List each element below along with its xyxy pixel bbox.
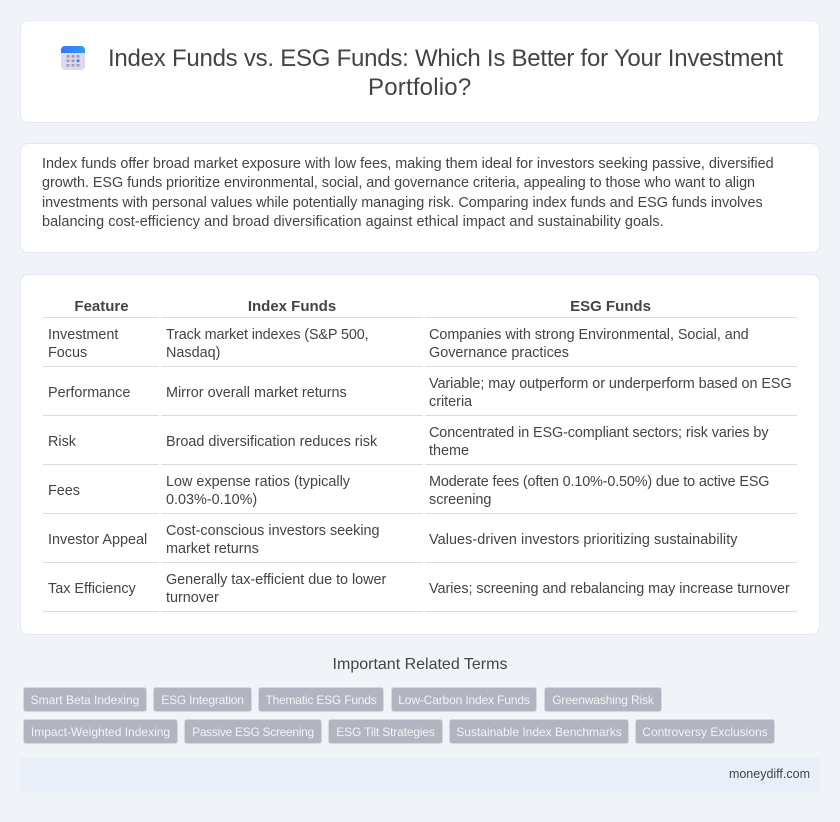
table row: Tax Efficiency: Generally tax-efficient due to lower [166,572,386,588]
table row: Fees [48,474,769,508]
text block: introduction: growth. ESG funds prioritize environmental, social, and governance criteria, appealing to those who want to align [42,175,755,191]
table header: Index Funds [248,298,336,315]
table row: Fees: 0.03%-0.10%) [166,492,257,508]
table row: Investment Focus: Nasdaq) [166,345,220,361]
tag list: related terms: Sustainable Index Benchmarks [456,725,622,739]
text block: introduction: investments with personal values while potentially managing risk. Comparing index funds and ESG funds involves [42,195,763,211]
table header: Feature [74,298,129,315]
tag list: related terms: Thematic ESG Funds [265,693,377,707]
table row: Investor Appeal: Investor Appeal [48,532,147,548]
table row: Fees: screening [429,492,491,508]
text block: introduction: Index funds offer broad market exposure with low fees, making them ideal for investors seeking passive, diversified [42,156,774,172]
tag list: related terms: Passive ESG Screening [192,725,314,739]
table header [74,298,651,315]
table row: Performance: Variable; may outperform or underperform based on ESG [429,376,792,392]
table row: Investor Appeal [48,523,738,557]
title [108,45,783,101]
tag list: related terms: Greenwashing Risk [552,693,654,707]
table row: Investor Appeal: Cost-conscious investors seeking [166,523,380,539]
icon: calendar [61,46,85,70]
title: Portfolio? [368,74,471,101]
tag list: related terms: Smart Beta Indexing [31,693,139,707]
table row: Investment Focus: Focus [48,345,87,361]
panel: intro text [20,143,820,253]
footer source text: moneydiff.com [729,767,810,781]
text block: introduction [42,156,774,230]
table row: Risk: Risk [48,434,76,450]
table row: Risk: theme [429,443,469,459]
table row: Risk: Broad diversification reduces risk [166,434,377,450]
table row: Fees: Low expense ratios (typically [166,474,350,490]
table row: Investment Focus: Governance practices [429,345,569,361]
table row: Investment Focus: Investment [48,327,118,343]
panel: title header [20,20,820,123]
table row: Performance: Performance [48,385,130,401]
tag list: related terms: ESG Tilt Strategies [336,725,435,739]
table row: Tax Efficiency: Varies; screening and rebalancing may increase turnover [429,581,790,597]
panel: comparison table [20,274,820,635]
tag list: related terms: Controversy Exclusions [642,725,768,739]
table row: Investment Focus: Companies with strong Environmental, Social, and [429,327,749,343]
table row: Investor Appeal: market returns [166,541,259,557]
tag list: related terms: Impact-Weighted Indexing [31,725,170,739]
table header: ESG Funds [570,298,651,315]
table row: Investor Appeal: Values-driven investors prioritizing sustainability [429,532,738,548]
table row: Fees: Moderate fees (often 0.10%-0.50%) due to active ESG [429,474,769,490]
table row: Risk [48,425,768,459]
table row: Performance: criteria [429,394,472,410]
table row: Investment Focus [48,327,749,361]
table row: Tax Efficiency: Tax Efficiency [48,581,136,597]
tag list: related terms [23,687,775,744]
table row: Performance [48,376,792,410]
footer bar [20,758,820,792]
table row: Fees: Fees [48,483,80,499]
table row: Performance: Mirror overall market returns [166,385,347,401]
tag list: related terms: Low-Carbon Index Funds [398,693,530,707]
title: Index Funds vs. ESG Funds: Which Is Better for Your Investment [108,45,783,72]
table row: Risk: Concentrated in ESG-compliant sectors; risk varies by [429,425,768,441]
text block: introduction: balancing cost-efficiency and broad diversification against ethical impact and sustainability goals. [42,214,664,230]
heading: important related terms: Important Related Terms [333,656,507,673]
tag list: related terms: ESG Integration [161,693,244,707]
table row: Tax Efficiency: turnover [166,590,219,606]
table row: Tax Efficiency [48,572,790,606]
table row: Investment Focus: Track market indexes (S&P 500, [166,327,368,343]
